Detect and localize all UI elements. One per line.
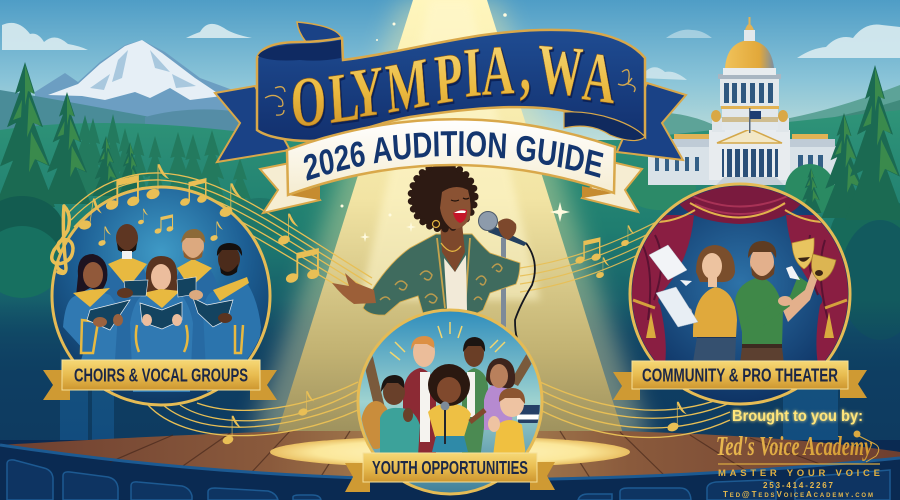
panel: choirs circle: [52, 187, 270, 405]
teeth: [454, 210, 466, 213]
front centre singer: [130, 256, 193, 392]
treble clef and notes on staff: [52, 164, 687, 446]
face: [440, 187, 471, 229]
books held by back row: [124, 277, 196, 297]
forest trees left: [0, 62, 142, 207]
ribbon: youth: YOUTH OPPORTUNITIES: [372, 458, 528, 478]
girl in purple: [484, 358, 515, 430]
navy curtains behind stage: [0, 300, 900, 450]
forest trees right: [785, 65, 900, 220]
right hand: [498, 218, 516, 240]
ribbon: choirs: [43, 360, 277, 400]
distant hills: [0, 85, 900, 180]
audience seats: [7, 460, 890, 500]
right tail: [617, 83, 686, 160]
email: Ted@TedsVoiceAcademy.com: [723, 490, 873, 499]
music staff: bottom left: [148, 382, 358, 436]
ribbon: theater: [613, 361, 867, 400]
subtitle text: 2026 AUDITION GUIDE: [304, 131, 604, 181]
neck: [440, 223, 465, 272]
curl: [290, 22, 342, 62]
choir singers: [63, 224, 261, 392]
roll shading: [258, 40, 341, 61]
ribbon: theater: COMMUNITY & PRO THEATER: [642, 366, 838, 386]
boy in green: [462, 337, 488, 460]
bottom right fold: [564, 112, 645, 141]
ornaments: [265, 70, 635, 115]
guitars: [362, 354, 540, 449]
audience area: [0, 440, 900, 500]
phone: 253-414-2267: [763, 481, 834, 490]
small tree line left: [71, 114, 254, 224]
stage floor: [0, 431, 900, 480]
back left singer: [108, 224, 147, 360]
scripts: [649, 245, 800, 327]
curtains: [632, 186, 848, 360]
boy in red: [403, 336, 436, 460]
actor: woman: [689, 245, 737, 360]
mountain: [35, 40, 238, 125]
background: sky: [0, 0, 900, 160]
eyes: [451, 198, 469, 201]
main banner: [257, 30, 645, 141]
microphone: [478, 212, 527, 246]
logo microphone: [854, 430, 879, 462]
rays: [390, 322, 505, 360]
left tail: [215, 86, 290, 162]
hair: [411, 165, 475, 229]
necklace: [441, 243, 461, 251]
front left singer: [63, 254, 130, 392]
jacket swirls: [380, 238, 502, 310]
music staff: bottom right: [540, 382, 730, 438]
title text: OLYMPIA, WA: [289, 27, 617, 142]
boy in teal: [380, 375, 420, 456]
drama masks: [792, 238, 836, 281]
earring: [432, 220, 440, 228]
forest mass: [0, 110, 900, 455]
spotlight beam: [275, 0, 625, 440]
panel: youth circle: [358, 310, 546, 494]
front right singer: [193, 243, 261, 392]
shirt: [444, 255, 467, 310]
title banner: [215, 22, 686, 162]
spotlight halo: [250, 0, 650, 440]
brought to you by: Brought to you by:: [732, 408, 863, 425]
background foliage: [0, 166, 900, 340]
stage light pool: [270, 436, 630, 468]
actor: man: [735, 241, 821, 364]
branding block: [716, 408, 880, 499]
mic stand and cable: [501, 238, 535, 338]
ribbon: youth: [345, 453, 555, 492]
cream band: [287, 119, 615, 195]
sparkles: [340, 13, 570, 242]
panel: theater circle: [620, 184, 860, 404]
ribbon: choirs: CHOIRS & VOCAL GROUPS: [74, 366, 248, 386]
music staff: right swoop: [520, 205, 690, 292]
left hand: [332, 273, 376, 304]
back right singer: [177, 229, 213, 360]
tagline: MASTER YOUR VOICE: [718, 468, 880, 479]
music staff: left swoop: [68, 173, 372, 306]
singer: [332, 165, 535, 338]
small notes inside circle: [98, 209, 223, 247]
capitol building: [648, 17, 840, 185]
jacket: [363, 234, 520, 317]
folds: [288, 186, 614, 200]
logo underline: [718, 463, 880, 465]
mouth: [453, 209, 467, 223]
spotlight core: [360, 0, 540, 300]
boy in yellow: [488, 388, 526, 456]
tails: [260, 163, 320, 213]
subtitle banner: [258, 118, 644, 214]
girl in yellow: [428, 364, 485, 452]
clouds: [2, 23, 900, 80]
